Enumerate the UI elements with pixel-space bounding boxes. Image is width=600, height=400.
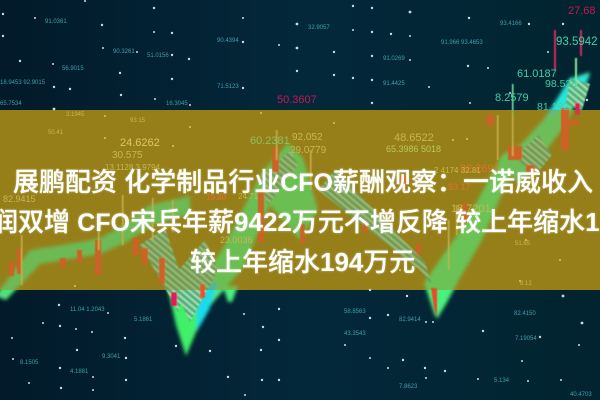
data numbers on the dark area: 90.4394 — [217, 38, 239, 44]
data numbers on the dark area: 11.04 1.2043 — [70, 307, 105, 313]
data numbers on the band: 93.17 — [448, 182, 471, 192]
data numbers on the dark area: 71.5123 — [217, 84, 239, 90]
data numbers on the band: 19.80 — [206, 193, 227, 202]
data numbers on the dark area: 91.4425 — [383, 81, 405, 87]
crimson numbers: 27.68 — [568, 5, 596, 17]
data numbers on the dark area: 4.1881 — [70, 369, 89, 375]
data numbers on the dark area: 82.4150 — [514, 311, 536, 317]
bright teal numbers upper right — [495, 36, 598, 113]
data numbers on the band: 8.12 — [520, 281, 532, 287]
crimson numbers — [277, 5, 596, 106]
data numbers on the band: 13.1128 3.9794 — [105, 163, 161, 172]
data numbers on the band: 32.2697 — [460, 163, 500, 175]
data numbers on the dark area: 58.8563 — [344, 309, 366, 315]
data numbers on the band: 92.052 — [292, 132, 323, 143]
gold band dots — [74, 112, 561, 287]
title line 3: 较上年缩水194万元 — [190, 247, 415, 277]
crimson numbers: 50.3607 — [277, 94, 317, 106]
data numbers on the band: 65.3986 5018 — [386, 144, 441, 154]
data numbers on the dark area: 65.7534 — [0, 101, 22, 107]
data numbers on the band: 93.15 — [130, 118, 146, 124]
data numbers on the dark area: 8.1505 — [20, 360, 39, 366]
data numbers on the band: 3.1945 — [66, 112, 85, 118]
data numbers on the dark area: 43.3543 — [344, 331, 366, 337]
data numbers on the dark area: 18.9453 92.9015 — [0, 80, 46, 86]
data numbers on the band: 48.6522 — [394, 132, 434, 144]
data numbers on the band: 82.9415 — [3, 194, 36, 204]
data numbers on the dark area: 56.9015 — [62, 66, 84, 72]
data numbers on the dark area: 9.3041 — [102, 354, 121, 360]
data numbers on the dark area: 51.0156 — [147, 53, 169, 59]
title line 2: 润双增 CFO宋兵年薪9422万元不增反降 较上年缩水1 — [0, 207, 600, 237]
data numbers on the band: 30.575 — [112, 150, 143, 161]
data numbers on the dark area: 91.0269 — [383, 56, 405, 62]
data numbers on the band: 50.41 — [48, 130, 64, 136]
data numbers on the band: 23.0036 — [220, 235, 253, 245]
bright teal numbers upper right: 61.0187 — [517, 68, 557, 80]
data numbers on the dark area: 32.9057 — [308, 25, 330, 31]
gold band base — [0, 110, 600, 290]
data numbers on the band: 60.2381 — [250, 135, 290, 147]
data numbers on the band: 24.71 — [238, 192, 259, 201]
data numbers on the band: 2 4174 32.81 — [434, 166, 481, 175]
data numbers on the dark area: 5.1861 — [134, 317, 153, 323]
bright teal numbers upper right: 8.2579 — [495, 92, 529, 104]
bright teal numbers upper right: 81.192 — [537, 101, 569, 113]
data numbers on the dark area: 91.0361 — [45, 19, 67, 25]
data numbers on the band: 29.0779 — [290, 145, 327, 156]
data numbers on the dark area: 7.19054 — [515, 336, 537, 342]
data numbers on the dark area: 90.3261 — [113, 49, 135, 55]
gold veil over the chart inside the band — [0, 110, 600, 290]
data numbers on the band: 24.6262 — [120, 137, 160, 149]
data numbers on the band: 18.7201 — [451, 203, 491, 215]
data numbers on the band: 51.65 — [515, 241, 531, 247]
title line 1: 展鹏配资 化学制品行业CFO薪酬观察：一诺威收入 — [13, 167, 593, 197]
data numbers on the dark area: 5.134 — [494, 378, 510, 384]
data numbers on the dark area: 40.4703 — [570, 392, 592, 398]
bright teal numbers upper right: 98.528 — [545, 78, 577, 90]
data numbers on the dark area: 82.9414 — [399, 317, 421, 323]
bright teal numbers upper right: 93.5942 — [556, 36, 598, 48]
data numbers on the dark area: 91.966 93.4653 — [441, 40, 483, 46]
data numbers on the dark area: 7.8623 — [399, 384, 418, 390]
data numbers on the dark area: 93.4166 — [500, 21, 522, 27]
data numbers on the dark area: 16.3045 — [166, 101, 188, 107]
data numbers on the band — [3, 112, 532, 287]
